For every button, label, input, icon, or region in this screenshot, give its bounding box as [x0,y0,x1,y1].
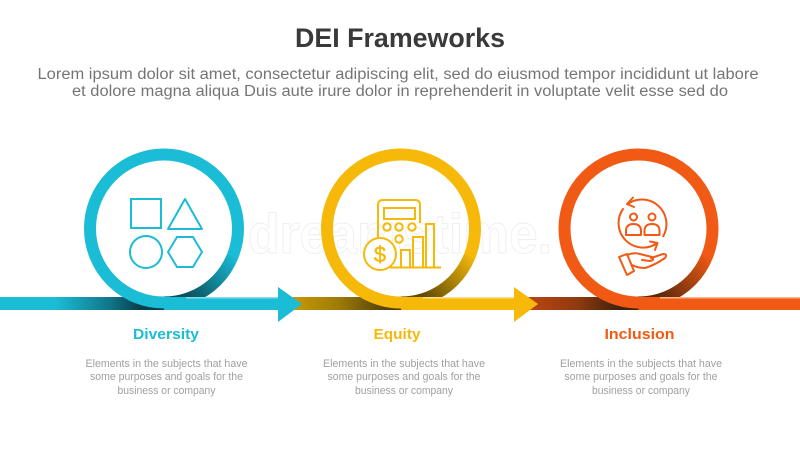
text: inclusion description: Elements in the subjects that have [560,358,722,370]
text: diversity description: business or company [118,385,216,397]
intro text: et dolore magna aliqua Duis aute irure dolor in reprehenderit in voluptate velit esse sed do [72,83,728,100]
icon: shapes [130,199,202,268]
text: diversity description: some purposes and goals for the [90,371,243,383]
text: diversity description [86,358,248,397]
arrow: diversity to equity [278,287,302,322]
heading: diversity: Diversity [133,326,200,343]
text: inclusion description: business or company [592,385,690,397]
icon: calculator with dollar coin and bars: $ [374,242,386,267]
heading: equity: Equity [374,326,421,343]
intro text [38,66,758,100]
title: DEI Frameworks [295,23,505,53]
icon: people cycle on open hand [619,198,666,275]
intro text: Lorem ipsum dolor sit amet, consectetur adipiscing elit, sed do eiusmod tempor incididunt ut labore [38,66,758,83]
arrow: equity to inclusion [514,287,538,322]
heading: inclusion: Inclusion [604,326,674,343]
panel: inclusion loop arrow [526,154,800,310]
text: equity description: Elements in the subjects that have [323,358,485,370]
text: inclusion description [560,358,722,397]
text: diversity description: Elements in the subjects that have [86,358,248,370]
icon: calculator with dollar coin and bars [364,200,441,270]
panel: equity loop arrow [288,154,517,310]
text: inclusion description: some purposes and goals for the [564,371,718,383]
text: equity description: some purposes and goals for the [328,371,480,383]
text: equity description [323,358,485,397]
panel: diversity loop arrow [0,154,280,310]
text: equity description: business or company [355,385,453,397]
watermark: dreamstime. [248,202,552,265]
